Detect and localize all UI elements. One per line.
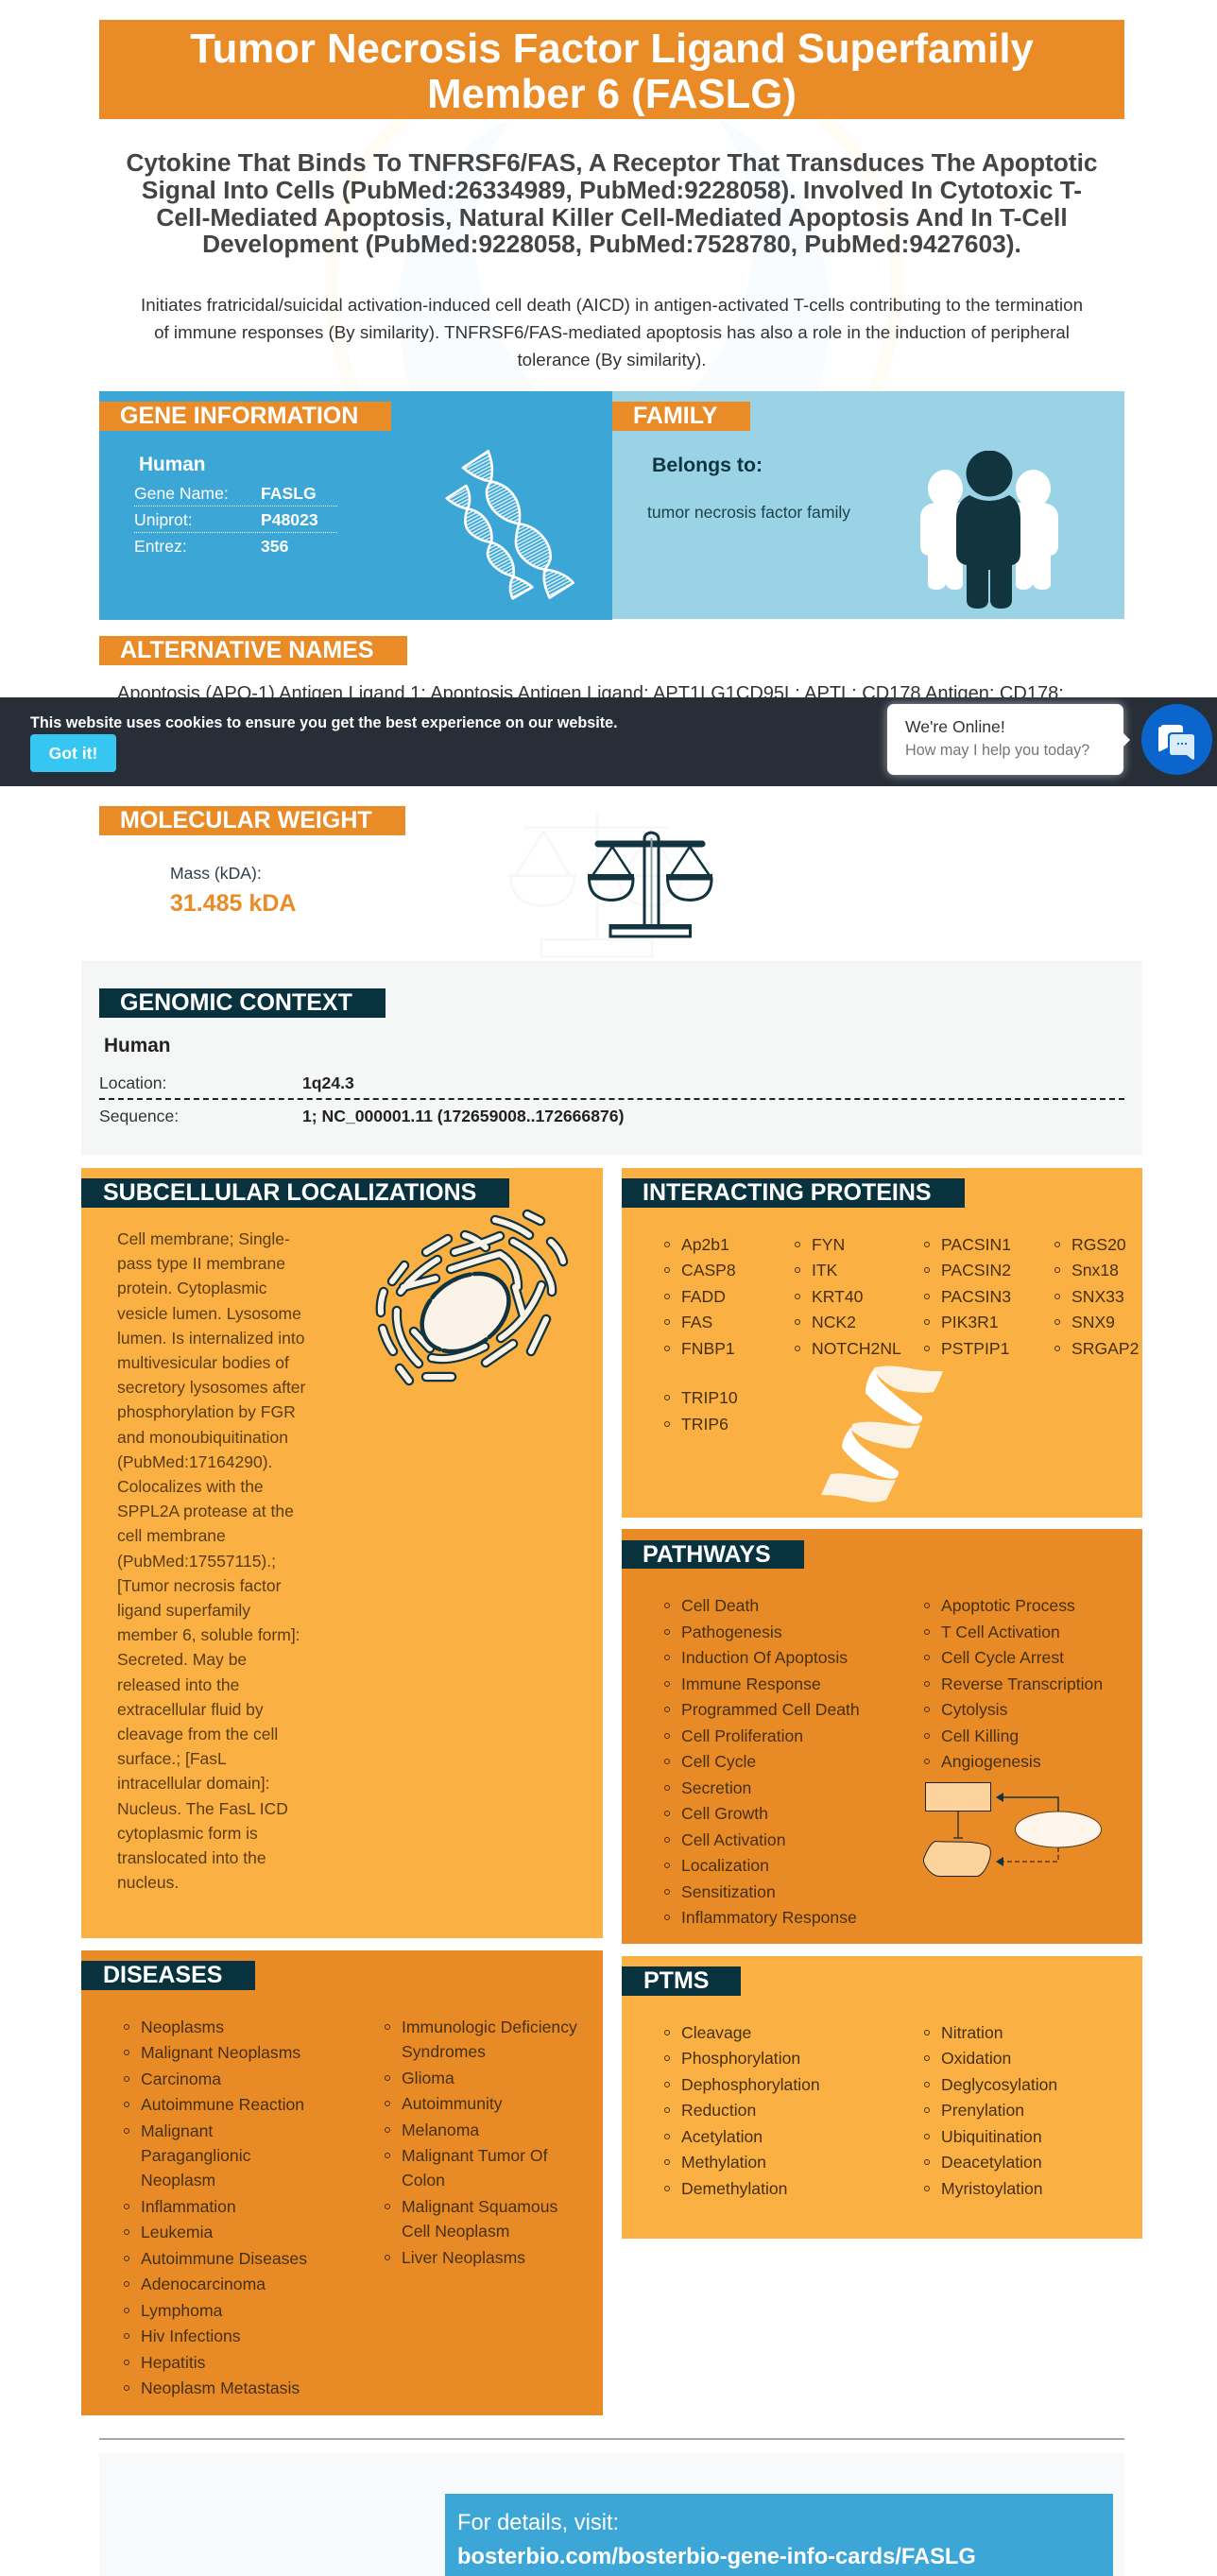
list: pathways column one: Sensitization [681, 1882, 776, 1901]
localization text: SPPL2A protease at the [117, 1502, 294, 1520]
panel: diseases [81, 1950, 603, 2415]
icon: DNA helices [445, 450, 574, 600]
localization text: multivesicular bodies of [117, 1353, 289, 1372]
list: PTMs column two: Oxidation [941, 2049, 1011, 2068]
list: interacting proteins: FNBP1 [681, 1339, 735, 1358]
callout url: bosterbio.com/bosterbio-gene-info-cards/FASLG [457, 2545, 976, 2569]
location row: Location: [99, 1073, 166, 1092]
species label: Human [104, 1035, 170, 1056]
mass value: 31.485 kDA [170, 890, 296, 917]
callout text: For details, visit: [457, 2511, 619, 2535]
subtitle: Cytokine That Binds To TNFRSF6/FAS, A Receptor That Transduces The Apoptotic [126, 148, 1098, 177]
list: interacting proteins: PACSIN3 [941, 1287, 1011, 1306]
list: PTMs column two: Myristoylation [941, 2179, 1043, 2198]
panel: family [612, 391, 1124, 619]
list: pathways column two: Apoptotic Process [941, 1596, 1075, 1615]
localization text: cytoplasmic form is [117, 1824, 258, 1843]
list: pathways column one: Inflammatory Response [681, 1908, 857, 1927]
localization text: cleavage from the cell [117, 1725, 278, 1743]
list: diseases column one: Paraganglionic [141, 2146, 250, 2165]
list: pathways column two: Cell Cycle Arrest [941, 1648, 1064, 1667]
list: diseases column two: Melanoma [402, 2121, 479, 2139]
cookie consent bar [0, 697, 1217, 786]
list: interacting proteins: TRIP10 [681, 1388, 738, 1407]
species label: Human [139, 454, 205, 475]
list: pathways column one: Induction Of Apoptosis [681, 1648, 848, 1667]
location row [99, 1073, 354, 1092]
localization text: Secreted. May be [117, 1650, 247, 1669]
entrez row: 356 [261, 537, 288, 556]
chat prompt: How may I help you today? [905, 742, 1089, 759]
background watermark logo [325, 119, 903, 391]
localization text: released into the [117, 1675, 239, 1694]
list: diseases column one: Autoimmune Diseases [141, 2249, 307, 2268]
list: diseases column one: Adenocarcinoma [141, 2275, 266, 2293]
list: pathways column one: Cell Death [681, 1596, 759, 1615]
list: interacting proteins: CASP8 [681, 1261, 736, 1279]
list: interacting proteins: FADD [681, 1287, 726, 1306]
list: diseases column two: Liver Neoplasms [402, 2248, 525, 2267]
localization text: Cell membrane; Single- [117, 1229, 290, 1248]
localization text: vesicle lumen. Lysosome [117, 1304, 301, 1323]
list: PTMs column one: Cleavage [681, 2023, 751, 2042]
localization text: member 6, soluble form]: [117, 1625, 300, 1644]
list: pathways column one: Secretion [681, 1778, 751, 1797]
panel: genomic context: 1; NC_000001.11 (172659008..172666876) [302, 1107, 624, 1125]
sequence row [99, 1107, 624, 1125]
list: diseases column one: Neoplasm Metastasis [141, 2379, 300, 2397]
mass label: Mass (kDA): [170, 864, 262, 883]
list: interacting proteins: Ap2b1 [681, 1235, 729, 1254]
panel: interacting proteins [622, 1168, 1142, 1518]
list: PTMs column one: Phosphorylation [681, 2049, 800, 2068]
description paragraph: Initiates fratricidal/suicidal activation-induced cell death (AICD) in antigen-activated T-cells contributing to the termination [141, 295, 1083, 315]
list: interacting proteins: TRIP6 [681, 1415, 728, 1434]
list: PTMs column one: Reduction [681, 2101, 756, 2120]
list: PTMs column one: Dephosphorylation [681, 2075, 820, 2094]
heading: family: FAMILY [633, 403, 717, 429]
title banner [99, 20, 1124, 119]
sequence row: Sequence: [99, 1107, 179, 1125]
list: interacting proteins: FAS [681, 1313, 712, 1331]
localization text: ligand superfamily [117, 1601, 250, 1620]
list: interacting proteins: NOTCH2NL [812, 1339, 901, 1358]
chat heading: We're Online! [905, 717, 1005, 736]
localization text: and monoubiquitination [117, 1428, 288, 1447]
panel: subcellular localizations [81, 1168, 603, 1938]
list: interacting proteins: PACSIN1 [941, 1235, 1011, 1254]
list: interacting proteins: SRGAP2 [1071, 1339, 1139, 1358]
panel: genomic context: 1q24.3 [302, 1073, 354, 1092]
list: pathways column one: Cell Cycle [681, 1752, 756, 1771]
title banner: Member 6 (FASLG) [427, 71, 797, 117]
localization text: lumen. Is internalized into [117, 1329, 304, 1348]
family name: tumor necrosis factor family [647, 503, 850, 522]
list: PTMs column one: Demethylation [681, 2179, 787, 2198]
alternative names text: Apoptosis (APO-1) Antigen Ligand 1; Apoptosis Antigen Ligand; APT1LG1CD95L; APTL; CD178 Antigen; CD178; [117, 683, 1064, 704]
list: interacting proteins: PACSIN2 [941, 1261, 1011, 1279]
list: PTMs column two: Deacetylation [941, 2153, 1042, 2172]
list: diseases column one: Neoplasm [141, 2171, 215, 2190]
list: diseases column one: Carcinoma [141, 2069, 221, 2088]
panel: gene information [99, 391, 612, 620]
list: pathways column two: T Cell Activation [941, 1623, 1060, 1641]
list: diseases column one: Hepatitis [141, 2353, 205, 2372]
icon: chat button [1141, 704, 1212, 775]
heading: pathways [622, 1540, 804, 1569]
list: PTMs column two: Nitration [941, 2023, 1003, 2042]
list: PTMs column two: Deglycosylation [941, 2075, 1057, 2094]
panel: genomic context [81, 961, 1142, 1155]
localization text: nucleus. [117, 1873, 179, 1892]
entrez row: Entrez: [134, 537, 187, 556]
list: interacting proteins: RGS20 [1071, 1235, 1126, 1254]
list: PTMs column one: Acetylation [681, 2127, 763, 2146]
gene name row [134, 480, 337, 507]
list: diseases column two [385, 2018, 577, 2267]
heading: diseases [81, 1961, 255, 1990]
list: diseases column two: Malignant Tumor Of [402, 2146, 548, 2165]
list: diseases column two: Malignant Squamous [402, 2197, 557, 2216]
list: PTMs column one: Methylation [681, 2153, 766, 2172]
panel: PTMs [622, 1956, 1142, 2239]
list: pathways column one: Cell Growth [681, 1804, 768, 1823]
list: PTMs column two [924, 2023, 1057, 2198]
list: diseases column two: Glioma [402, 2069, 454, 2087]
icon: protein ribbon [821, 1366, 943, 1503]
heading: interacting proteins: INTERACTING PROTEINS [643, 1179, 932, 1206]
list: diseases column one: Autoimmune Reaction [141, 2095, 304, 2114]
list: diseases column one: Hiv Infections [141, 2327, 241, 2345]
subtitle: Development (PubMed:9228058, PubMed:7528780, PubMed:9427603). [202, 230, 1021, 258]
list: diseases column one: Malignant Neoplasms [141, 2043, 300, 2062]
localization text: (PubMed:17557115).; [117, 1552, 276, 1571]
list: interacting proteins [664, 1235, 1139, 1434]
localization text: [Tumor necrosis factor [117, 1576, 281, 1595]
localization text: translocated into the [117, 1848, 266, 1867]
list: pathways column one: Cell Proliferation [681, 1726, 803, 1745]
localization text: secretory lysosomes after [117, 1378, 305, 1397]
list: interacting proteins: ITK [812, 1261, 837, 1279]
description paragraph: of immune responses (By similarity). TNFRSF6/FAS-mediated apoptosis has also a role in the induction of peripheral [154, 322, 1070, 342]
title banner: Tumor Necrosis Factor Ligand Superfamily [190, 26, 1034, 72]
list: interacting proteins: PSTPIP1 [941, 1339, 1009, 1358]
list: diseases column one: Malignant [141, 2121, 213, 2140]
localization text: pass type II membrane [117, 1254, 285, 1273]
heading: molecular weight: MOLECULAR WEIGHT [120, 807, 372, 833]
button: got it [30, 734, 116, 772]
list: diseases column one: Lymphoma [141, 2301, 222, 2320]
list: interacting proteins: FYN [812, 1235, 845, 1254]
list: pathways column one: Localization [681, 1856, 769, 1875]
list: pathways column one: Immune Response [681, 1674, 821, 1693]
icon: pathway diagram [922, 1782, 1102, 1877]
list: PTMs column two: Ubiquitination [941, 2127, 1042, 2146]
list: pathways column two: Angiogenesis [941, 1752, 1041, 1771]
list: diseases column two: Colon [402, 2171, 445, 2190]
heading: diseases: DISEASES [103, 1962, 222, 1988]
heading: gene information: GENE INFORMATION [120, 403, 358, 429]
footer panel [99, 2453, 1124, 2576]
icon: group of people [920, 451, 1058, 609]
localization text: Nucleus. The FasL ICD [117, 1799, 288, 1818]
list: pathways column one [664, 1596, 860, 1927]
list: pathways column two: Cytolysis [941, 1700, 1007, 1719]
list: interacting proteins: KRT40 [812, 1287, 863, 1306]
icon: endoplasmic reticulum cell [376, 1210, 569, 1385]
localization text: Colocalizes with the [117, 1477, 264, 1496]
list: interacting proteins: SNX33 [1071, 1287, 1124, 1306]
localization text [117, 1229, 306, 1892]
list: interacting proteins: PIK3R1 [941, 1313, 999, 1331]
localization text: phosphorylation by FGR [117, 1402, 296, 1421]
gene name row: FASLG [261, 484, 317, 503]
list: PTMs column two: Prenylation [941, 2101, 1024, 2120]
cookie message: This website uses cookies to ensure you get the best experience on our website. [30, 714, 618, 731]
chat bubble [887, 704, 1123, 775]
list: interacting proteins: NCK2 [812, 1313, 856, 1331]
list: pathways column two: Cell Killing [941, 1726, 1019, 1745]
description paragraph [141, 295, 1083, 369]
panel: pathways [622, 1529, 1142, 1944]
belongs to label: Belongs to: [652, 454, 763, 476]
subtitle [126, 148, 1098, 258]
dashed divider [99, 1098, 1124, 1100]
button: got it: Got it! [49, 744, 97, 763]
uniprot row: Uniprot: [134, 510, 193, 529]
list: pathways column two: Reverse Transcription [941, 1674, 1103, 1693]
entrez row [134, 537, 288, 556]
heading: PTMs [622, 1966, 741, 1996]
heading: family [612, 402, 750, 431]
list: pathways column one: Programmed Cell Death [681, 1700, 860, 1719]
heading: subcellular localizations: SUBCELLULAR LOCALIZATIONS [103, 1179, 476, 1206]
gene name row: Gene Name: [134, 484, 229, 503]
icon: balance scale [588, 832, 712, 937]
list: diseases column two: Syndromes [402, 2042, 486, 2061]
list: interacting proteins: Snx18 [1071, 1261, 1119, 1279]
list: diseases column two: Immunologic Deficiency [402, 2018, 577, 2036]
subtitle: Cell-Mediated Apoptosis, Natural Killer Cell-Mediated Apoptosis And In T-Cell [156, 203, 1068, 232]
localization text: protein. Cytoplasmic [117, 1279, 267, 1297]
callout: details link [445, 2494, 1113, 2576]
list: pathways column two [924, 1596, 1103, 1771]
list: PTMs column one [664, 2023, 820, 2198]
list: diseases column one: Inflammation [141, 2197, 236, 2216]
localization text: intracellular domain]: [117, 1774, 269, 1793]
list: diseases column two: Autoimmunity [402, 2094, 503, 2113]
list: pathways column one: Cell Activation [681, 1830, 786, 1849]
chat bubble pointer [1123, 733, 1130, 747]
heading: alternative names: ALTERNATIVE NAMES [120, 637, 374, 663]
uniprot row [134, 507, 337, 533]
description paragraph: tolerance (By similarity). [517, 350, 707, 369]
list: diseases column two: Cell Neoplasm [402, 2222, 509, 2241]
heading: PTMs: PTMS [643, 1967, 709, 1994]
localization text: (PubMed:17164290). [117, 1452, 272, 1471]
icon: faint background scale [508, 813, 682, 958]
list: pathways column one: Pathogenesis [681, 1623, 782, 1641]
uniprot row: P48023 [261, 510, 318, 529]
list: interacting proteins: SNX9 [1071, 1313, 1115, 1331]
heading: genomic context: GENOMIC CONTEXT [120, 989, 352, 1016]
localization text: surface.; [FasL [117, 1749, 227, 1768]
list: diseases column one: Neoplasms [141, 2018, 224, 2036]
localization text: extracellular fluid by [117, 1700, 264, 1719]
list: diseases column one: Leukemia [141, 2223, 213, 2241]
list: diseases column one [124, 2018, 307, 2397]
heading: pathways: PATHWAYS [643, 1541, 771, 1568]
localization text: cell membrane [117, 1526, 226, 1545]
subtitle: Signal Into Cells (PubMed:26334989, PubMed:9228058). Involved In Cytotoxic T- [142, 176, 1082, 204]
